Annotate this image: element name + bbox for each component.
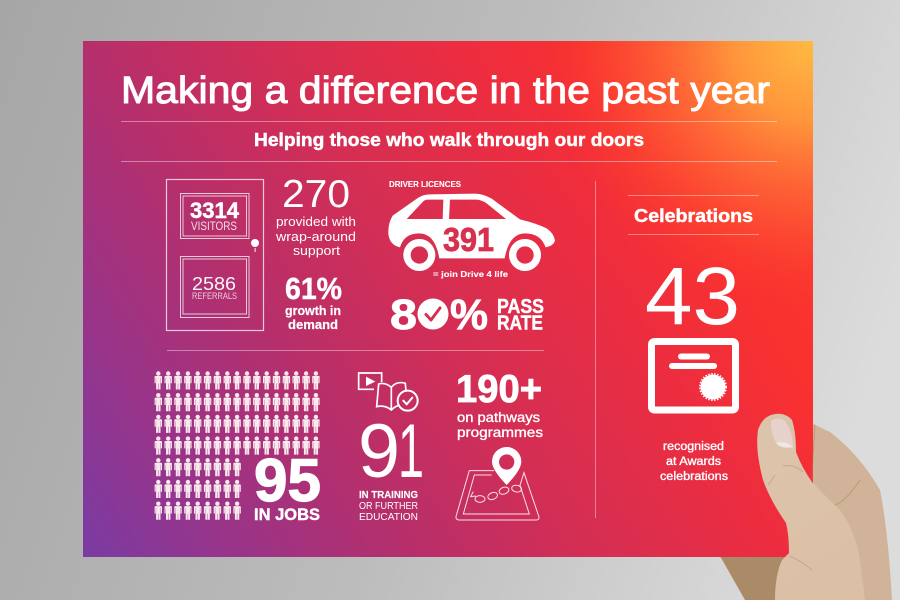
door icon with visitors and referrals [166,180,264,330]
door icon with visitors and referrals: 2586 [192,274,236,294]
stat: 95 in jobs: IN JOBS [254,505,320,524]
stat: 91 in training: 1 [398,409,424,494]
stat: 80% pass rate: % [450,291,488,339]
recognised at awards text [660,441,728,483]
stat: 190+ pathways: 190+ [456,368,542,411]
icon: video, book and check [359,373,418,411]
driver licences label: DRIVER LICENCES [389,180,462,189]
stat: 80% pass rate [390,291,544,339]
join drive 4 life note: = join Drive 4 life [433,270,509,279]
stat: 61% growth in demand: 61% [285,271,342,306]
stat: 190+ pathways [456,368,543,440]
stat: 91 in training: OR FURTHER [359,500,418,512]
stat: 270 wrap-around support: wrap-around [275,229,356,244]
stat: 91 in training: IN TRAINING [359,489,418,501]
stat: 270 wrap-around support: support [293,243,340,258]
stat: 190+ pathways: programmes [457,425,543,440]
pictogram: 95 people [155,371,320,520]
door icon with visitors and referrals: REFERRALS [192,291,237,302]
hand thumb over card [757,414,865,600]
stat: 91 in training: EDUCATION [359,511,418,523]
stat: 80% pass rate: RATE [497,312,543,334]
icon: map with pin [456,447,539,520]
hand behind card [718,420,892,600]
icon: certificate [652,342,736,410]
stat: 61% growth in demand [285,271,342,332]
subtitle band [121,122,777,162]
door icon with visitors and referrals: 3314 [190,198,240,223]
dividers [167,181,596,518]
subtitle band: Helping those who walk through our doors [254,130,644,150]
celebrations heading [628,196,759,234]
car icon with 391: 391 [443,221,494,258]
stat: 91 in training [358,409,424,523]
stat: 270 wrap-around support: 270 [282,173,350,216]
celebrations heading: Celebrations [634,206,753,226]
stat: 61% growth in demand: growth in [285,303,341,318]
recognised at awards text: at Awards [666,456,721,468]
title: Making a difference in the past year [121,70,770,112]
stat: 61% growth in demand: demand [288,317,338,332]
stat: 80% pass rate: 8 [390,291,417,339]
recognised at awards text: recognised [663,441,724,453]
stat: 95 in jobs: 95 [254,447,321,514]
stat: 270 wrap-around support [275,173,356,258]
recognised at awards text: celebrations [660,471,728,483]
stat: 270 wrap-around support: provided with [276,214,356,229]
stat: 190+ pathways: on pathways [457,410,540,425]
door icon with visitors and referrals: VISITORS [191,221,237,233]
stat: 91 in training: 9 [358,409,400,494]
stat: 80% pass rate: PASS [497,296,544,318]
car icon with 391 [388,194,555,271]
stat: 43: 43 [645,251,740,342]
card [83,41,813,557]
